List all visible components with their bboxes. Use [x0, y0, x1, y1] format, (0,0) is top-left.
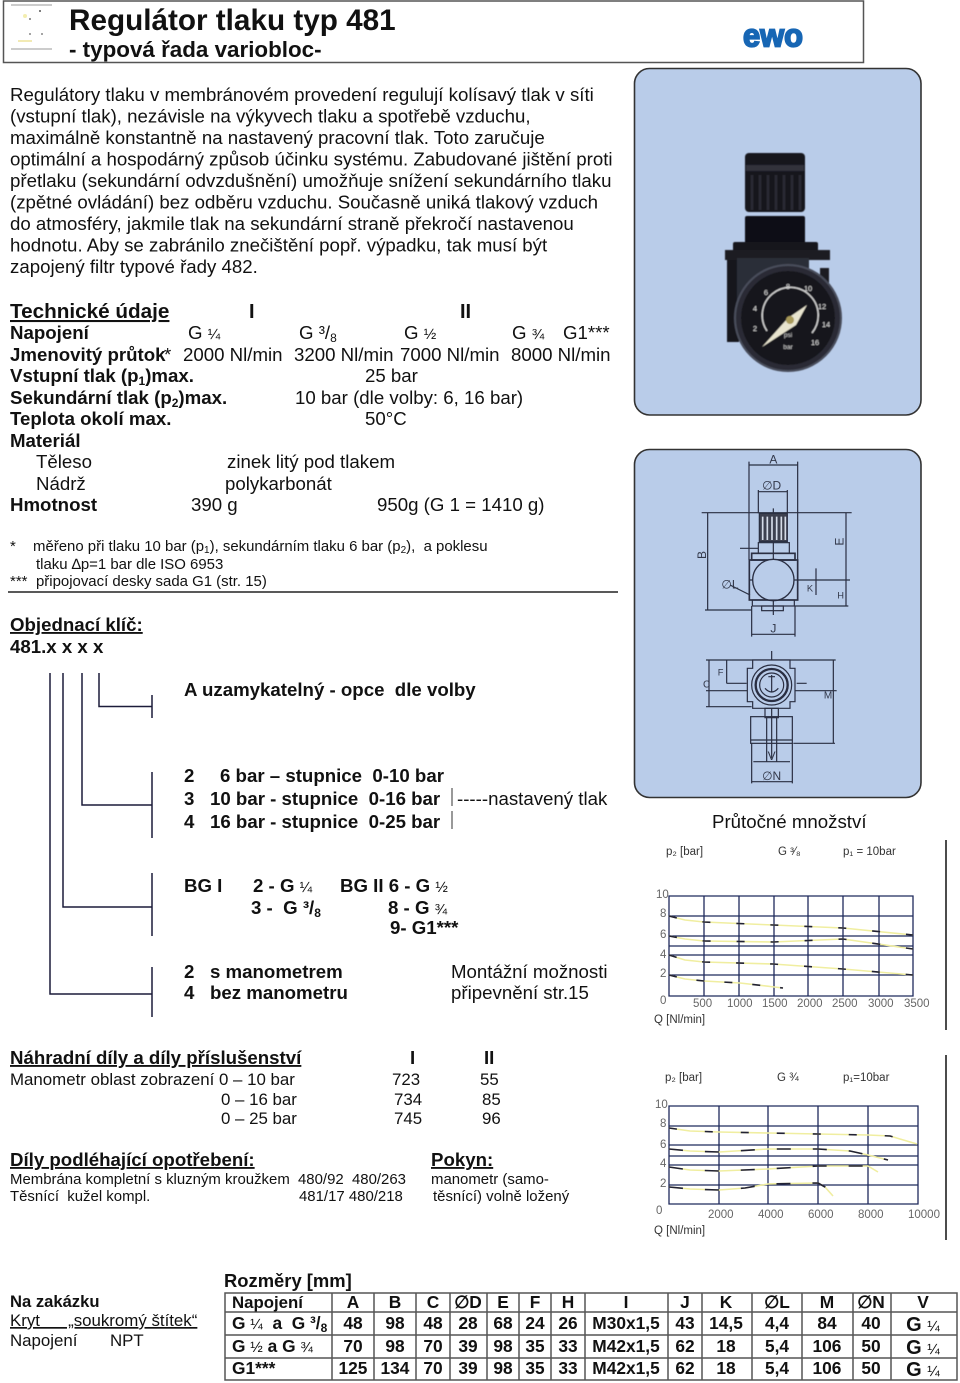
axis labels: 10	[655, 1099, 668, 1111]
table row: G1: 50	[861, 1358, 881, 1378]
section: spare parts	[10, 1047, 501, 1128]
footnotes: ***	[10, 573, 28, 590]
row: inlet pressure: 25 bar	[365, 365, 418, 386]
axis labels: 4000	[758, 1209, 784, 1221]
table row: G 1/4 and G 3/8: 24	[525, 1313, 545, 1333]
intro paragraph: (zpětné ovládání) bez odběru vzduchu. Současně uniká tlakový vzduch	[10, 192, 598, 212]
wear parts rows: 481/17 480/218	[299, 1188, 403, 1205]
icon: pressure regulator with gauge: 10	[804, 284, 812, 293]
wear parts rows: 480/92 480/263	[298, 1171, 406, 1188]
option: pressure ranges	[184, 765, 608, 832]
table header row: K	[720, 1292, 733, 1312]
axis labels: 8	[660, 1118, 666, 1130]
section: note	[431, 1149, 570, 1205]
row: ambient temperature	[10, 408, 407, 429]
intro paragraph: do atmosféry, jakmile tlak na sekundární straně překročí nastavenou	[10, 213, 574, 234]
option: connection sizes	[184, 875, 459, 938]
intro paragraph: hodnotu. Aby se zabránilo znečištění popř. výpadku, tak musí být	[10, 234, 548, 256]
table row: G 1/4 and G 3/8: 14,5	[709, 1313, 743, 1333]
footnotes: 1	[204, 545, 210, 556]
table row: G1: 70	[423, 1358, 443, 1378]
row: connection: Napojení	[10, 322, 90, 343]
axis labels: G ¾	[777, 1072, 799, 1084]
spare parts rows: Manometr oblast zobrazení 0 – 10 bar	[10, 1070, 295, 1089]
table row: G 1/2 and G 3/4: 70	[423, 1336, 443, 1356]
row: material	[10, 430, 395, 494]
axis labels: 6000	[808, 1209, 834, 1221]
heading: technical data: I	[249, 301, 255, 323]
table row: G1: 98	[493, 1358, 513, 1378]
custom order rows: NPT	[110, 1331, 144, 1350]
technical drawing: side and top views: V	[768, 749, 776, 763]
spare parts rows	[10, 1070, 501, 1128]
technical drawing: side and top views: ∅N	[762, 769, 781, 783]
row: material: Těleso	[36, 451, 92, 472]
row: material: zinek litý pod tlakem	[227, 451, 395, 472]
axis labels: G ³⁄₈	[778, 846, 801, 858]
table header row: M	[820, 1292, 834, 1312]
table header row: I	[624, 1292, 628, 1312]
table row: G1: 35	[525, 1358, 545, 1378]
option: gauge	[184, 961, 608, 1003]
intro paragraph: (vstupní tlak), nezávisle na výkyvech tlaku a spotřebě vzduchu,	[10, 106, 531, 126]
table row: G 1/4 and G 3/8: M30x1,5	[592, 1313, 660, 1333]
axis labels: 8	[660, 908, 666, 920]
table grid	[225, 1293, 957, 1380]
section: custom order	[10, 1292, 197, 1350]
wear parts rows: Membrána kompletní s kluzným kroužkem	[10, 1171, 290, 1188]
custom order rows: Kryt „soukromý štítek“	[10, 1311, 197, 1330]
spare parts rows: 96	[482, 1109, 501, 1128]
heading: wear parts: Díly podléhající opotřebení:	[10, 1149, 255, 1170]
intro paragraph: maximálně konstantně na nastavený pracovní tlak. Toto zaručuje	[10, 127, 545, 148]
chart: flow G 3/4	[654, 1072, 940, 1237]
option: connection sizes: 2 - G ¼	[253, 875, 313, 896]
technical drawing: side and top views: A	[769, 453, 777, 467]
table row: G 1/2 and G 3/4: 70	[343, 1336, 363, 1356]
technical drawing: side and top views: E	[832, 538, 846, 546]
footnotes: připojovací desky sada G1 (str. 15)	[36, 573, 267, 590]
option: lockable knob: A uzamykatelný - opce dle volby	[184, 679, 476, 700]
row: nominal flow: 2000 Nl/min	[183, 344, 283, 365]
heading: dimensions: Rozměry [mm]	[224, 1270, 352, 1291]
technical drawing: side and top views: K	[807, 584, 814, 594]
footnotes: ), a poklesu	[406, 538, 488, 555]
flow curves	[669, 1128, 917, 1196]
table header row	[232, 1292, 929, 1312]
spare parts rows: 0 – 25 bar	[221, 1109, 297, 1128]
table row: G 1/4 and G 3/8: 26	[558, 1313, 578, 1333]
table row: G 1/2 and G 3/4: 98	[385, 1336, 405, 1356]
panel: product photo	[634, 68, 921, 415]
key tree lines	[50, 673, 152, 1017]
row: connection	[10, 322, 610, 345]
table row: G 1/2 and G 3/4: 35	[525, 1336, 545, 1356]
row: connection: G ³/	[299, 322, 330, 343]
heading: spare parts: I	[410, 1047, 415, 1068]
axis labels: 1500	[762, 998, 788, 1010]
table header row: B	[389, 1292, 401, 1312]
axis labels: 0	[660, 995, 666, 1007]
axis labels: 10	[656, 889, 669, 901]
icon: pressure regulator with gauge: 4	[753, 304, 757, 313]
option: pressure ranges: 10 bar - stupnice 0-16 bar	[210, 788, 440, 809]
option: connection sizes: 8 - G ¾	[388, 897, 448, 918]
table row: G1: G ¼	[906, 1359, 940, 1381]
row: connection: G1***	[563, 322, 610, 343]
axis labels: 2	[660, 1178, 666, 1190]
table row: G 1/2 and G 3/4: 98	[493, 1336, 513, 1356]
table row: G 1/4 and G 3/8: G ¼	[906, 1314, 940, 1336]
axis labels: p₁ = 10bar	[843, 846, 896, 858]
axis labels: p₁=10bar	[843, 1072, 890, 1084]
row: nominal flow: 7000 Nl/min	[400, 344, 500, 365]
table row: G 1/4 and G 3/8: 4,4	[765, 1313, 789, 1333]
axis labels: 0	[656, 1205, 662, 1217]
table row: G 1/2 and G 3/4: G ½ a G ¾	[232, 1336, 313, 1356]
table header row: Napojení	[232, 1293, 304, 1312]
option: gauge: Montážní možnosti	[451, 961, 608, 982]
heading: custom order: Na zakázku	[10, 1292, 99, 1311]
heading: technical data: II	[460, 301, 471, 323]
table header row: A	[347, 1292, 360, 1312]
note text: manometr (samo-	[431, 1171, 549, 1188]
row: inlet pressure: )max.	[145, 365, 194, 386]
table header row: F	[530, 1292, 540, 1312]
option: connection sizes: 9- G1***	[390, 917, 459, 938]
subtitle: - typová řada variobloc-	[69, 37, 322, 62]
row: nominal flow	[10, 344, 611, 365]
row: secondary pressure: 10 bar (dle volby: 6, 16 bar)	[295, 387, 523, 408]
intro paragraph: zapojený filtr typové řady 482.	[10, 256, 258, 277]
custom order rows	[10, 1311, 197, 1350]
option: pressure ranges: 3	[184, 788, 194, 809]
spare parts rows: 734	[394, 1090, 422, 1109]
row: secondary pressure: Sekundární tlak (p	[10, 387, 172, 408]
option: connection sizes: 3 - G ³/	[251, 897, 314, 918]
axis labels: Q [Nl/min]	[654, 1225, 705, 1237]
wear parts rows: Těsnící kužel kompl.	[10, 1188, 150, 1205]
axis labels: 1000	[727, 998, 753, 1010]
table row: G1: G1***	[232, 1358, 276, 1378]
section: wear parts	[10, 1149, 406, 1205]
table header row: ∅N	[857, 1292, 885, 1312]
table row: G1: 33	[558, 1358, 578, 1378]
row: weight: 950g (G 1 = 1410 g)	[377, 494, 545, 515]
table row: G 1/2 and G 3/4: 106	[813, 1336, 842, 1356]
table header row: J	[680, 1292, 690, 1312]
heading: note: Pokyn:	[431, 1149, 493, 1170]
chart heading: Průtočné množství	[712, 811, 867, 832]
axis labels: 4	[660, 1158, 667, 1170]
row: nominal flow: *	[164, 344, 171, 365]
option: pressure ranges: 4	[184, 811, 195, 832]
axis labels: 2000	[797, 998, 823, 1010]
flow curves	[669, 916, 913, 988]
technical drawing: side and top views: ∅D	[762, 479, 782, 493]
table row: G1: 62	[675, 1358, 695, 1378]
table row: G1: 5,4	[765, 1358, 789, 1378]
technical drawing: side and top views: M	[824, 690, 832, 701]
row: secondary pressure: 2	[172, 396, 179, 410]
table row: G 1/4 and G 3/8: 8	[321, 1321, 328, 1335]
footnotes	[8, 538, 618, 592]
row: connection: G ¼	[188, 322, 221, 343]
technical drawing: side and top views: ∅L	[721, 577, 739, 591]
icon: pressure regulator with gauge: 12	[818, 302, 826, 311]
footnotes: tlaku ∆p=1 bar dle ISO 6953	[36, 556, 223, 573]
axis labels: 6	[660, 1139, 666, 1151]
table row: G 1/2 and G 3/4: 5,4	[765, 1336, 789, 1356]
option: pressure ranges: 2	[184, 765, 194, 786]
table header row: ∅D	[454, 1292, 482, 1312]
option: gauge: 4	[184, 982, 195, 1003]
axis labels: 3000	[868, 998, 894, 1010]
spare parts rows: 745	[394, 1109, 422, 1128]
row: inlet pressure: 1	[139, 374, 146, 388]
axis labels	[654, 846, 930, 1026]
row: connection: G ¾	[512, 322, 545, 343]
table row: G1: 125	[339, 1358, 368, 1378]
table row: G 1/2 and G 3/4: 33	[558, 1336, 578, 1356]
row: secondary pressure	[10, 387, 523, 410]
axis labels: 4	[660, 949, 667, 961]
row: weight: Hmotnost	[10, 494, 97, 515]
chart grid	[669, 896, 913, 996]
row: nominal flow: 3200 Nl/min	[294, 344, 394, 365]
order code: 481.x x x x	[10, 636, 104, 657]
row: material: Materiál	[10, 430, 81, 451]
row: weight: 390 g	[191, 494, 238, 515]
table header row: V	[917, 1292, 929, 1312]
intro paragraph	[10, 84, 613, 277]
table header row: ∅L	[764, 1292, 790, 1312]
table row: G 1/2 and G 3/4: M42x1,5	[592, 1336, 660, 1356]
technical drawing: side and top views: F	[718, 668, 724, 678]
intro paragraph: optimální a hospodárný způsob účinku systému. Zabudované jištění proti	[10, 148, 613, 170]
row: nominal flow: Jmenovitý průtok	[10, 344, 166, 365]
spare parts rows: 55	[480, 1070, 499, 1089]
chart side rules	[945, 840, 947, 1240]
icon: pressure regulator with gauge: 6	[764, 288, 768, 297]
icon: pressure regulator with gauge: 16	[811, 338, 819, 347]
row: ambient temperature: Teplota okolí max.	[10, 408, 171, 429]
row: inlet pressure	[10, 365, 418, 388]
icon: pressure regulator with gauge: psi	[784, 332, 792, 339]
row: connection: 8	[330, 331, 337, 345]
table row: G 1/2 and G 3/4: 39	[458, 1336, 478, 1356]
chart: flow G 3/8	[654, 846, 930, 1026]
table row: G 1/2 and G 3/4	[232, 1336, 940, 1359]
row: nominal flow: 8000 Nl/min	[511, 344, 611, 365]
technical drawing: side and top views: H	[837, 590, 844, 600]
axis labels: Q [Nl/min]	[654, 1014, 705, 1026]
table row: G 1/4 and G 3/8: G ¼ a G ³/	[232, 1313, 321, 1333]
axis labels: p₂ [bar]	[666, 846, 703, 858]
table row: G 1/2 and G 3/4: G ¼	[906, 1337, 940, 1359]
heading: technical data: Technické údaje	[10, 300, 169, 323]
table header row: C	[427, 1292, 440, 1312]
axis labels: 2000	[708, 1209, 734, 1221]
row: material: Nádrž	[36, 473, 86, 494]
axis labels: 2	[660, 968, 666, 980]
heading: order key: Objednací klíč:	[10, 614, 143, 635]
table row: G 1/4 and G 3/8: 48	[423, 1313, 443, 1333]
heading: spare parts: II	[484, 1047, 494, 1068]
table row: G 1/4 and G 3/8: 68	[493, 1313, 513, 1333]
intro paragraph: přetlaku (sekundární odvzdušnění) umožňuje snížení sekundárního tlaku	[10, 170, 612, 191]
option: gauge: s manometrem	[210, 961, 343, 982]
axis labels: 2500	[832, 998, 858, 1010]
option: connection sizes: BG II 6 - G ½	[340, 875, 448, 896]
option: connection sizes: 8	[314, 906, 321, 920]
table row: G1	[232, 1358, 940, 1381]
section: technical data	[10, 300, 611, 515]
axis labels	[654, 1072, 940, 1237]
option: connection sizes: BG I	[184, 875, 222, 896]
panel: dimension drawing	[634, 450, 921, 798]
axis labels: 6	[660, 929, 666, 941]
spare parts rows: 0 – 16 bar	[221, 1090, 297, 1109]
heading: spare parts: Náhradní díly a díly příslušenství	[10, 1047, 302, 1068]
table header row: H	[562, 1292, 574, 1312]
table row: G 1/4 and G 3/8: 84	[817, 1313, 837, 1333]
footnotes: ), sekundárním tlaku 6 bar (p	[210, 538, 401, 555]
table row: G1: 39	[458, 1358, 478, 1378]
table row: G1: 134	[381, 1358, 410, 1378]
row: ambient temperature: 50°C	[365, 408, 407, 429]
row: material: polykarbonát	[225, 473, 333, 494]
option: gauge: připevnění str.15	[451, 982, 589, 1003]
table row: G1: 18	[716, 1358, 736, 1378]
table row: G 1/4 and G 3/8: 43	[675, 1313, 695, 1333]
axis labels: 3500	[904, 998, 930, 1010]
table row: G 1/4 and G 3/8: 48	[343, 1313, 363, 1333]
custom order rows: Napojení	[10, 1331, 78, 1350]
technical drawing: side and top views: J	[770, 622, 776, 636]
icon: pressure regulator with gauge: 2	[753, 324, 757, 333]
footnotes: *	[10, 538, 16, 555]
section: order key	[10, 614, 608, 1017]
axis labels: 8000	[858, 1209, 884, 1221]
row: weight	[10, 494, 545, 515]
intro paragraph: Regulátory tlaku v membránovém provedení regulují kolísavý tlak v síti	[10, 84, 594, 105]
icon: pressure regulator with gauge: 8	[786, 282, 790, 291]
technical drawing: side and top views: C	[703, 680, 710, 691]
spare parts rows: 85	[482, 1090, 501, 1109]
row: connection: G ½	[404, 322, 437, 343]
table row: G1: M42x1,5	[592, 1358, 660, 1378]
technical drawing: side and top views	[695, 453, 852, 783]
table row: G 1/4 and G 3/8	[232, 1313, 940, 1336]
title: Regulátor tlaku typ 481	[69, 4, 396, 37]
table header row: E	[497, 1292, 509, 1312]
footnotes: měřeno při tlaku 10 bar (p	[33, 538, 204, 555]
axis labels: p₂ [bar]	[665, 1072, 702, 1084]
row: secondary pressure: )max.	[178, 387, 227, 408]
wear parts rows	[10, 1171, 406, 1205]
option: pressure ranges: 16 bar - stupnice 0-25 bar	[210, 811, 440, 832]
note text	[431, 1171, 570, 1205]
icon: pressure regulator with gauge: bar	[783, 344, 794, 351]
option: gauge: bez manometru	[210, 982, 348, 1003]
heading: spare parts	[10, 1047, 494, 1068]
table row: G 1/2 and G 3/4: 18	[716, 1336, 736, 1356]
logo: ewo: ewo	[743, 18, 803, 54]
row: inlet pressure: Vstupní tlak (p	[10, 365, 139, 386]
axis labels: 500	[693, 998, 712, 1010]
icon: pressure regulator with gauge: 14	[822, 320, 830, 329]
technical drawing: side and top views: B	[695, 551, 709, 559]
option: pressure ranges: -----nastavený tlak	[457, 788, 608, 809]
chart grid	[669, 1106, 918, 1204]
axis labels: 10000	[908, 1209, 940, 1221]
footnotes: 2	[401, 545, 407, 556]
heading: technical data	[10, 300, 471, 323]
table row: G 1/2 and G 3/4: 50	[861, 1336, 881, 1356]
section: dimensions table	[224, 1270, 957, 1381]
table row: G 1/2 and G 3/4: 62	[675, 1336, 695, 1356]
icon: pressure regulator with gauge	[725, 153, 841, 371]
table row: G 1/4 and G 3/8: 40	[861, 1313, 881, 1333]
icon: small header emblem	[11, 5, 52, 49]
table row: G1: 106	[813, 1358, 842, 1378]
option: gauge: 2	[184, 961, 194, 982]
table row: G 1/4 and G 3/8: 28	[458, 1313, 478, 1333]
spare parts rows: 723	[392, 1070, 420, 1089]
note text: těsnící) volně ložený	[433, 1188, 570, 1205]
header bar	[4, 1, 864, 62]
table row: G 1/4 and G 3/8: 98	[385, 1313, 405, 1333]
option: pressure ranges: 6 bar – stupnice 0-10 bar	[220, 765, 444, 786]
